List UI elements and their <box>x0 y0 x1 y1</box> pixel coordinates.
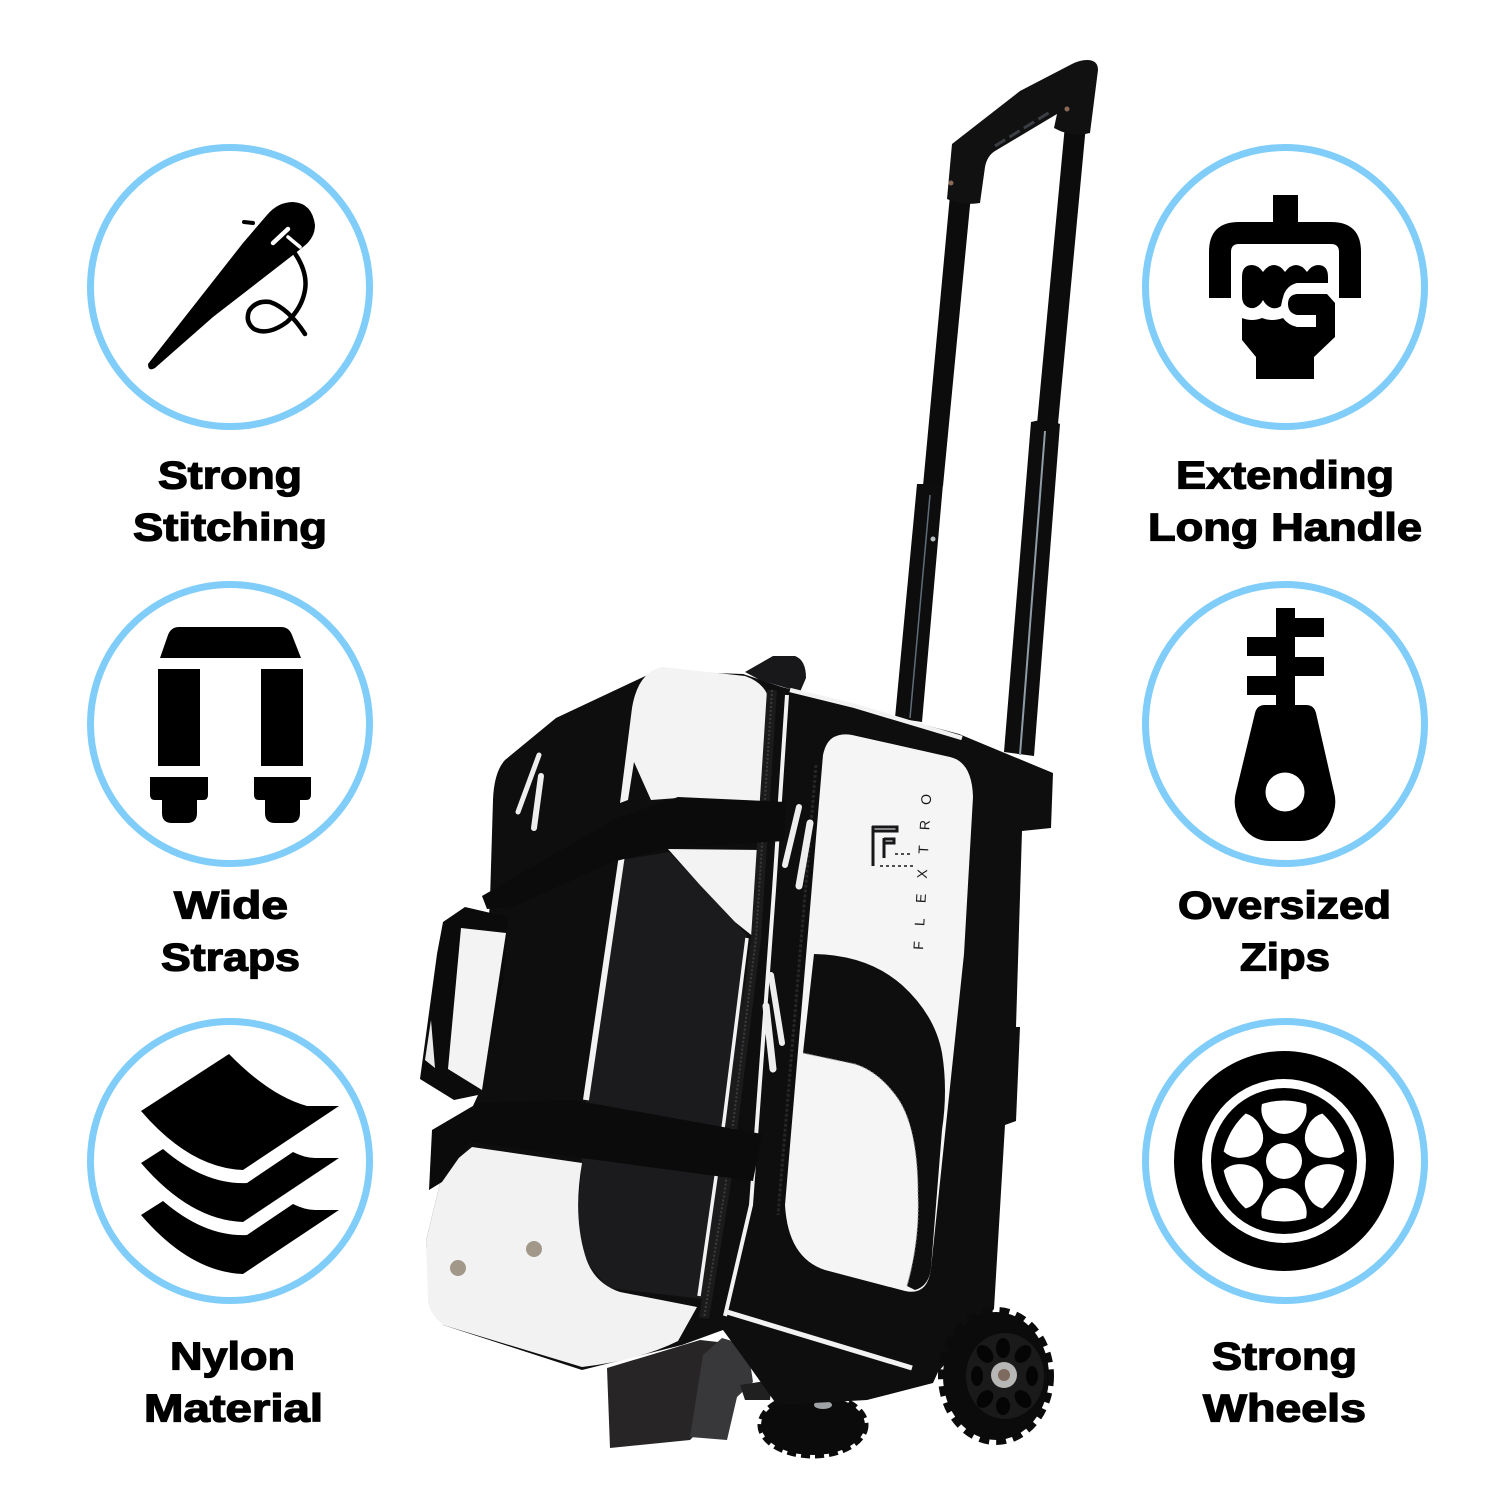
label: Strong <box>158 454 302 498</box>
product: rolling bowling bag <box>420 60 1098 1456</box>
white upper panel <box>620 667 770 805</box>
white mid panel <box>668 849 764 938</box>
icon: zip pull <box>1235 608 1335 841</box>
label: Long Handle <box>1148 506 1422 550</box>
label <box>1148 454 1422 550</box>
white lower panel <box>426 1147 697 1367</box>
front wheel <box>941 1310 1051 1442</box>
feature: strong stitching <box>90 148 370 550</box>
grab handle <box>420 907 508 1100</box>
telescopic handle <box>895 60 1098 756</box>
icon: fabric layers <box>141 1054 339 1274</box>
front rivets <box>450 1241 542 1276</box>
feature: wide straps <box>90 584 370 980</box>
circle <box>90 584 370 864</box>
rear wheel <box>760 1394 866 1456</box>
central black panel <box>578 852 747 1300</box>
label <box>144 1336 323 1430</box>
circle <box>1146 584 1424 864</box>
label: Wheels <box>1203 1388 1366 1430</box>
label: Strong <box>1212 1336 1357 1378</box>
label <box>161 884 300 980</box>
circle <box>90 1022 370 1300</box>
icon: wheel <box>1174 1051 1394 1271</box>
label: Material <box>144 1388 323 1430</box>
front pocket white <box>785 734 973 1292</box>
label <box>133 454 327 550</box>
label <box>1203 1336 1366 1430</box>
icon: hand gripping handle <box>1209 195 1361 379</box>
zippers and piping <box>699 690 962 1368</box>
brand name: FLEXTRO <box>910 793 934 950</box>
bag body <box>426 671 1053 1405</box>
circle <box>1146 148 1424 426</box>
icon: needle and thread <box>148 202 315 369</box>
label: Oversized <box>1178 884 1391 928</box>
feature: strong wheels <box>1146 1022 1424 1430</box>
top web strap <box>482 797 786 909</box>
pocket zipper <box>778 765 816 1215</box>
feature: oversized zips <box>1146 584 1424 980</box>
label: Zips <box>1240 936 1330 980</box>
icon: straps <box>150 627 311 823</box>
feature: extending long handle <box>1146 148 1424 550</box>
top carry handle <box>745 656 806 692</box>
label: Wide <box>174 884 288 928</box>
circle <box>90 148 370 426</box>
zip pulls <box>518 755 810 1069</box>
retractable foot stand <box>607 1338 772 1448</box>
feature: nylon material <box>90 1022 370 1430</box>
label: Straps <box>161 936 300 980</box>
brand logo <box>872 793 934 950</box>
pocket stitching <box>803 1053 918 1286</box>
circle <box>1146 1022 1424 1300</box>
label <box>1178 884 1391 980</box>
lower web strap <box>429 1100 762 1190</box>
label: Stitching <box>133 506 327 550</box>
label: Nylon <box>170 1336 295 1378</box>
pocket black swoosh <box>803 954 945 1290</box>
label: Extending <box>1176 454 1394 498</box>
white piping on centre panel <box>586 855 622 1100</box>
